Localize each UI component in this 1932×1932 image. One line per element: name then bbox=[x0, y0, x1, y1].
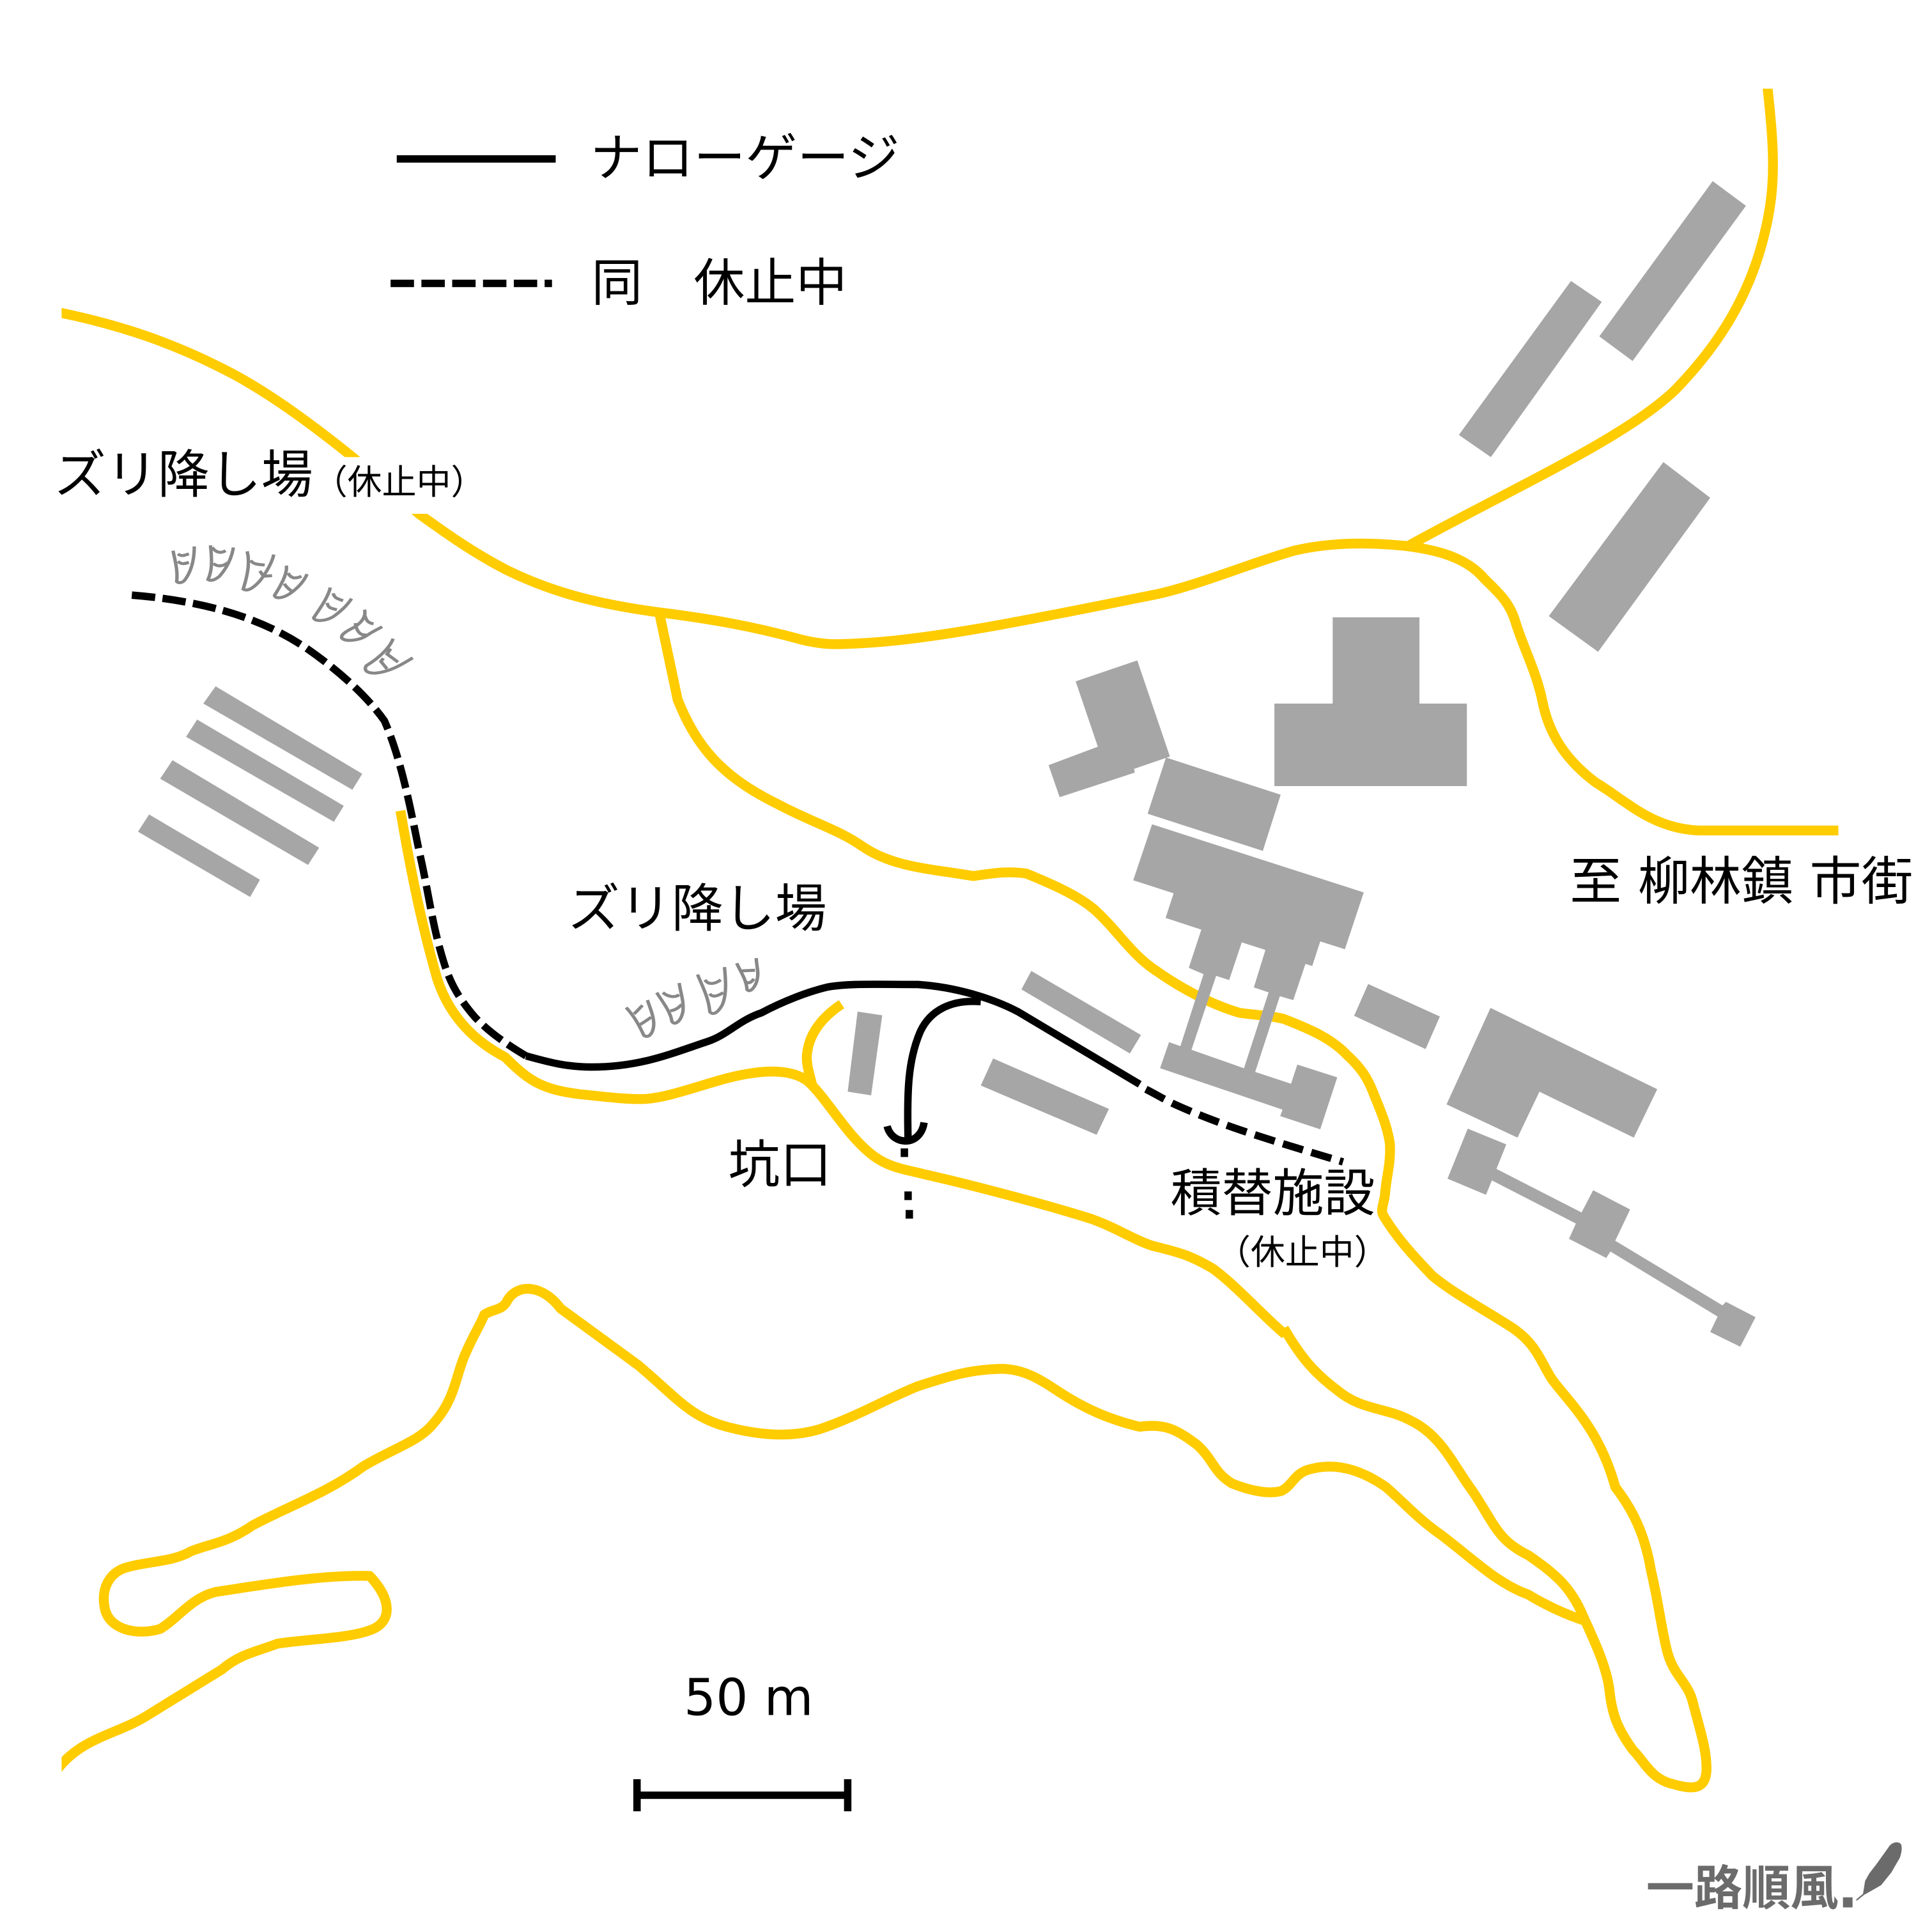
scale label: 50 m bbox=[684, 1669, 814, 1727]
label background bbox=[49, 457, 474, 514]
legend: label narrow gauge: ナローゲージ bbox=[590, 130, 900, 188]
narrow gauge: mine branch bbox=[908, 1001, 981, 1140]
road: main upper bbox=[56, 312, 1838, 830]
mine entrance arc bbox=[887, 1122, 924, 1141]
legend: solid line bbox=[397, 157, 555, 161]
building: L-shaped bbox=[1049, 660, 1170, 797]
label: waste dump: ズリ降し場 bbox=[568, 881, 827, 938]
road: south winding bbox=[56, 1289, 1583, 1772]
label: waste dump suspended: ズリ降し場 bbox=[54, 447, 313, 504]
scale bar bbox=[637, 1779, 847, 1811]
label: to town: 至 柳林鎮 市街 bbox=[1570, 852, 1913, 912]
road: central branch bbox=[659, 612, 1706, 1788]
road: lower track side bbox=[401, 811, 1285, 1334]
buildings bbox=[138, 181, 1756, 1347]
building: processing plant bbox=[1133, 824, 1364, 1129]
icon: feather bbox=[1856, 1843, 1902, 1901]
buildings: conveyor group bbox=[1448, 1129, 1756, 1347]
road: spur near mine bbox=[807, 1004, 842, 1085]
legend bbox=[390, 130, 900, 311]
road: north-east bbox=[1409, 77, 1773, 546]
building: large east bbox=[1446, 1008, 1657, 1138]
logo bbox=[1646, 1843, 1902, 1922]
legend: dashed line bbox=[390, 281, 552, 285]
building: small east bbox=[1354, 984, 1440, 1049]
narrow gauge: suspended track west bbox=[132, 595, 526, 1056]
label: transfer suspended note: （休止中） bbox=[1216, 1233, 1389, 1272]
building: rectangle bbox=[1148, 757, 1281, 851]
mine tunnel dots bbox=[900, 1148, 913, 1219]
logo period: . bbox=[1838, 1846, 1857, 1922]
legend: label suspended: 同 休止中 bbox=[591, 254, 847, 311]
buildings: north-east bbox=[1459, 181, 1746, 652]
waste pile marks: centre bbox=[626, 958, 758, 1037]
narrow gauge: active track bbox=[526, 984, 1140, 1085]
label: mine entrance: 坑口 bbox=[728, 1137, 831, 1194]
waste pile marks: west bbox=[173, 545, 413, 673]
logo text: 一路順風 bbox=[1646, 1862, 1838, 1915]
label: transfer facility: 積替施設 bbox=[1171, 1165, 1375, 1222]
buildings: centre small bbox=[847, 971, 1141, 1135]
narrow gauge: suspended track east bbox=[1146, 1089, 1343, 1162]
building row: left bbox=[138, 686, 362, 897]
building: T-shaped bbox=[1274, 617, 1467, 786]
label: suspended note: （休止中） bbox=[313, 463, 486, 502]
